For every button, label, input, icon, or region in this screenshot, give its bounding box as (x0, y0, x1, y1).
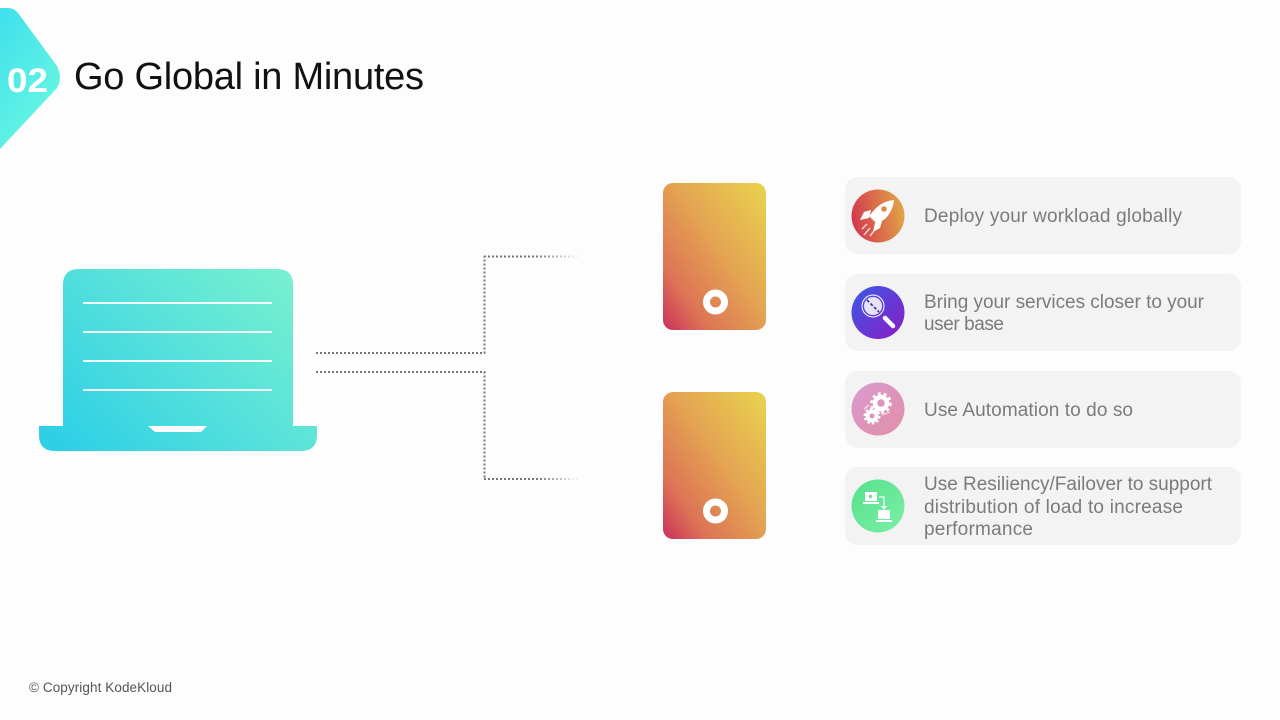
text (924, 292, 1205, 335)
text: performance (924, 519, 1033, 540)
panel: closer to user base (845, 274, 1241, 351)
server: lower device (663, 392, 766, 539)
icon: laptop (39, 269, 317, 451)
panel: automation (845, 371, 1241, 448)
server: upper device (663, 183, 766, 330)
text: distribution of load to increase (924, 497, 1183, 518)
connector: upper dotted route (316, 256, 580, 353)
section number badge: 02 (7, 62, 48, 100)
text (924, 474, 1213, 540)
footer copyright: © Copyright KodeKloud (29, 680, 172, 695)
text: user base (924, 314, 1004, 335)
section number badge (0, 8, 60, 149)
icon: failover laptops (852, 480, 904, 532)
icon: magnifier (852, 286, 904, 339)
panel: deploy globally (845, 177, 1241, 254)
title: Go Global in Minutes (74, 56, 424, 98)
text: Use Resiliency/Failover to support (924, 474, 1213, 495)
text: Bring your services closer to your (924, 292, 1205, 313)
connector: lower dotted route (316, 372, 580, 479)
text: Deploy your workload globally (924, 206, 1182, 227)
panel: resiliency and failover (845, 467, 1241, 545)
icon: rocket (852, 190, 904, 242)
icon: gears (852, 382, 904, 436)
text: Use Automation to do so (924, 400, 1133, 421)
